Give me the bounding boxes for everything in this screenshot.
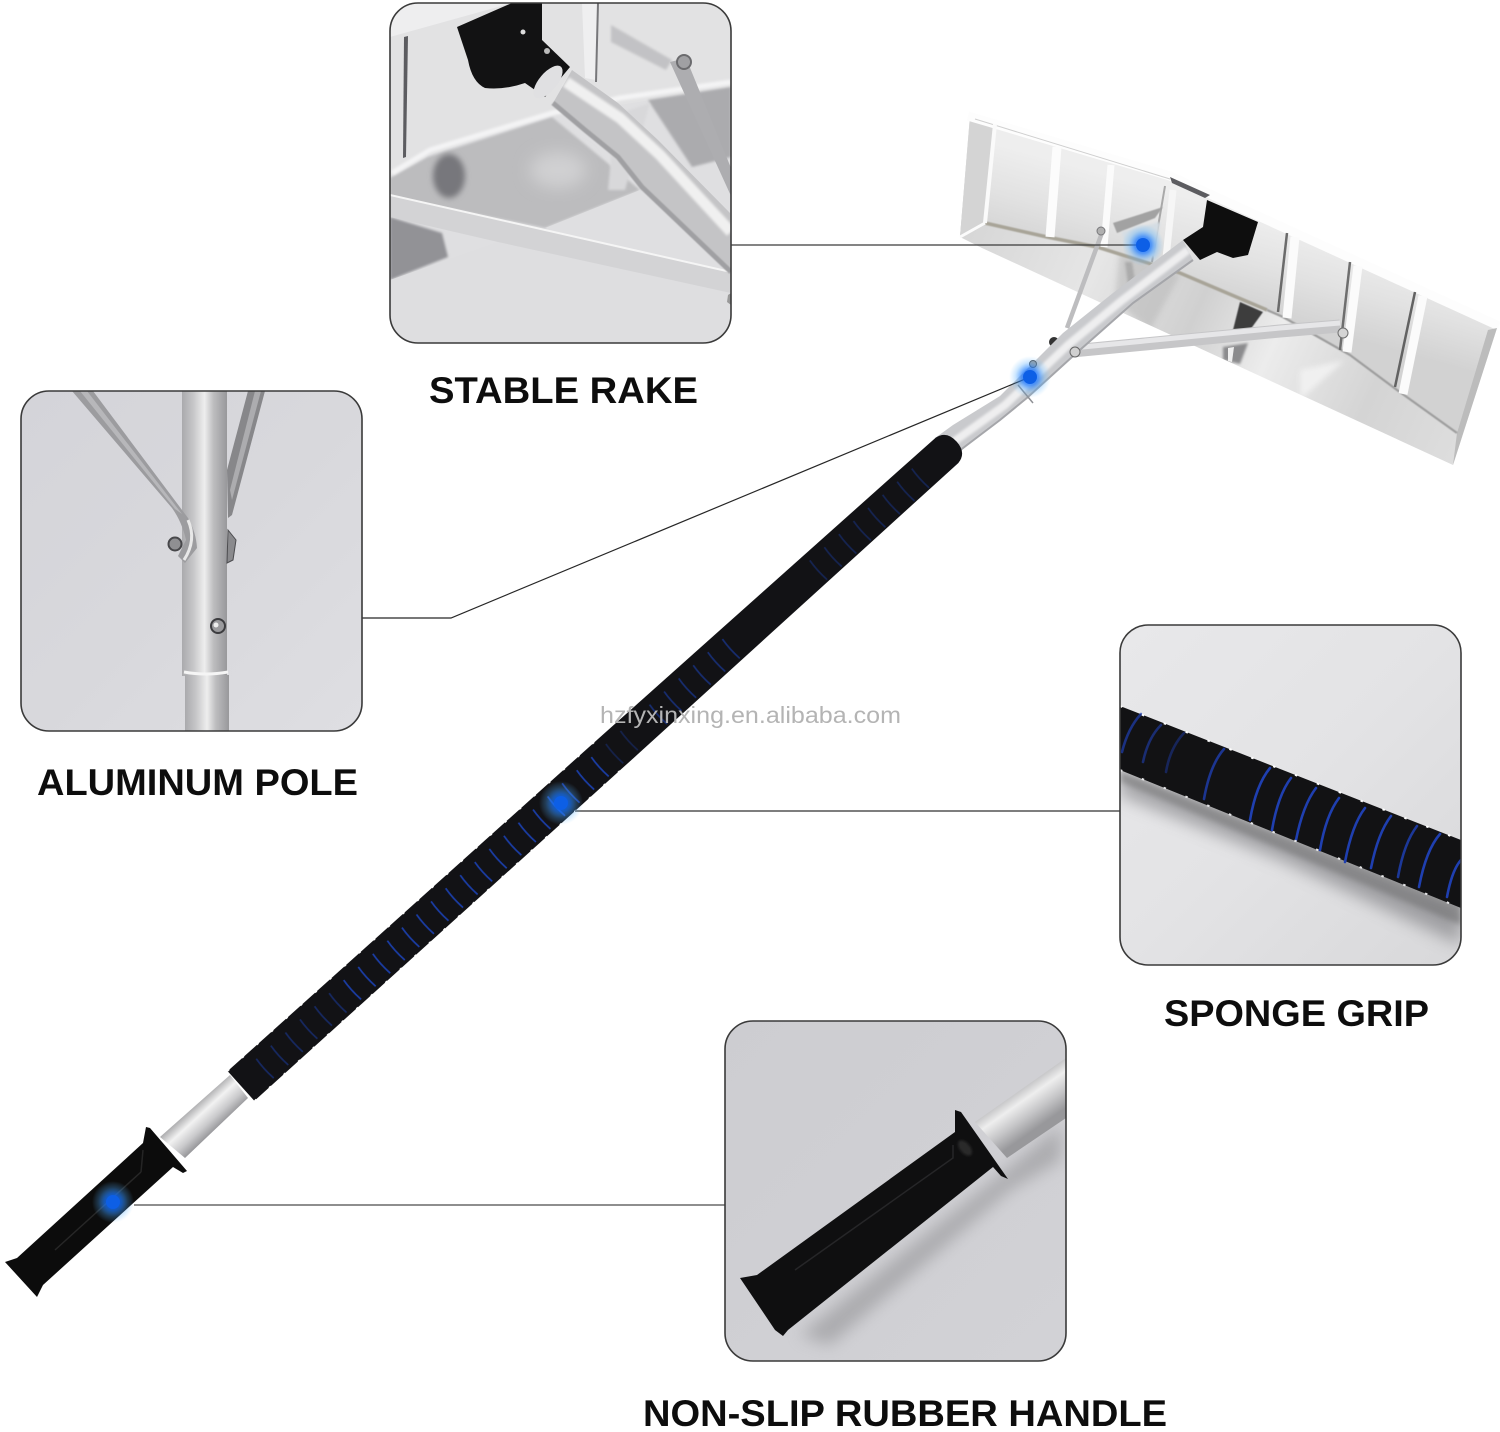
- callout line: sponge grip: [575, 810, 1120, 812]
- right strap: [227, 391, 265, 518]
- left bolt: [168, 538, 182, 550]
- marker: foam dot: [539, 781, 583, 825]
- right brace: [1072, 326, 1340, 351]
- panel: sponge grip close-up: [1120, 625, 1461, 965]
- blade ribs: [985, 124, 1423, 394]
- panel: stable rake close-up: [390, 3, 731, 343]
- watermark: hzfyxinxing.en.alibaba.com: [600, 702, 901, 728]
- left brace: [1067, 230, 1103, 328]
- aluminum pole lower section: [160, 1075, 248, 1158]
- callout line: stable rake: [731, 244, 1143, 246]
- left strap: [72, 391, 197, 563]
- heading: aluminum pole: ALUMINUM POLE: [37, 762, 358, 803]
- heading: stable rake: STABLE RAKE: [429, 370, 698, 411]
- heading: sponge grip: SPONGE GRIP: [1164, 993, 1429, 1034]
- marker: rake dot: [1122, 224, 1164, 266]
- panel: rubber handle close-up: [725, 1021, 1066, 1361]
- pole bolt: [211, 619, 225, 633]
- rake brace in panel: [670, 58, 731, 196]
- sponge foam grip: [227, 427, 970, 1101]
- non-slip rubber handle: [5, 1127, 187, 1297]
- callout line: aluminum pole: [362, 377, 1030, 618]
- marker: pole dot: [1009, 356, 1051, 398]
- rake blade: [960, 116, 1499, 465]
- curved tube: [553, 70, 731, 272]
- callout line: rubber handle: [134, 1204, 725, 1206]
- panel: aluminum pole close-up: [21, 391, 362, 735]
- aluminum pole upper section: [935, 240, 1193, 458]
- black bracket: [457, 3, 570, 97]
- rake bracket: [1183, 200, 1258, 260]
- marker: handle dot: [92, 1181, 134, 1223]
